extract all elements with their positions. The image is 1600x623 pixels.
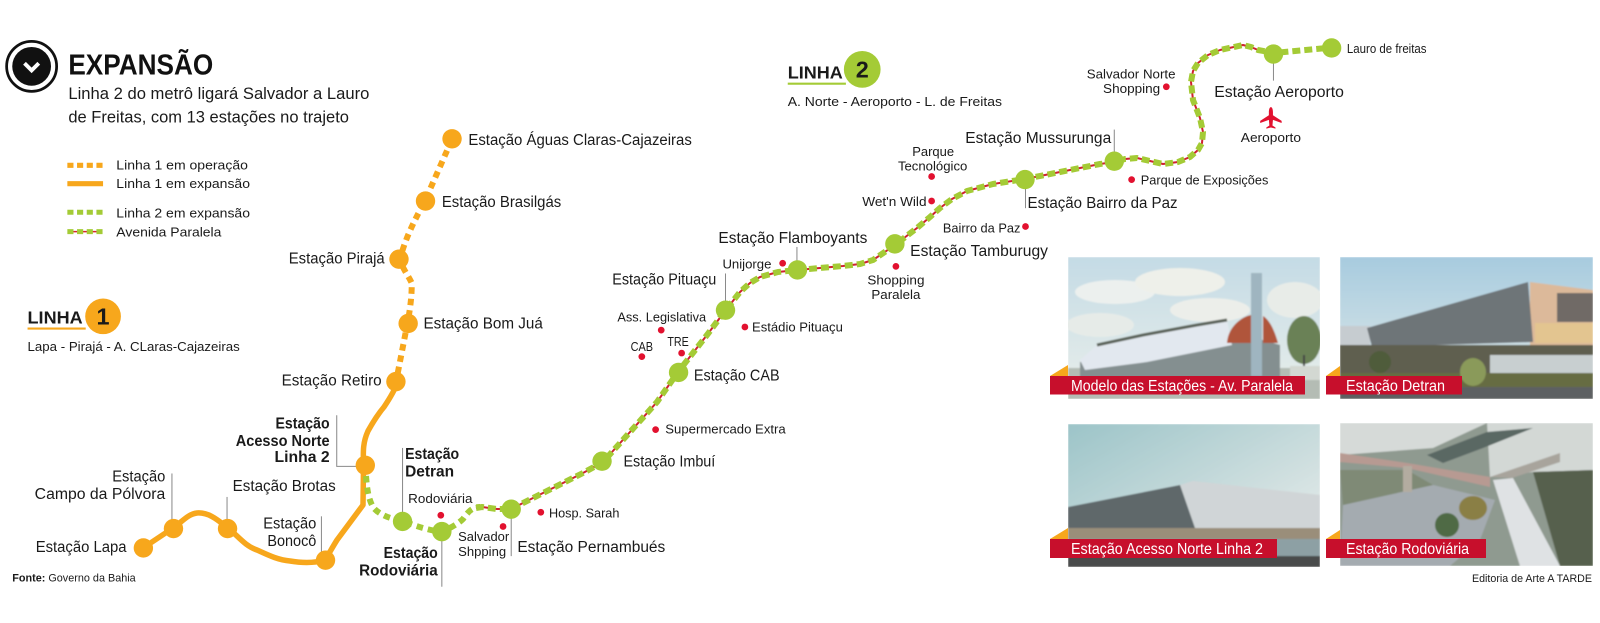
panel: photo estação acesso norte <box>1050 424 1320 567</box>
point of interest labels: Parque <box>912 144 954 159</box>
line 1 in expansion (solid) <box>143 383 397 562</box>
station labels: bold interchange stations: Estação <box>384 545 438 562</box>
heading: linha 2: LINHA <box>788 63 843 83</box>
credit: Editoria de Arte A TARDE <box>1472 573 1592 585</box>
point of interest labels: TRE <box>667 334 689 349</box>
icon: chevron badge <box>7 41 57 91</box>
panel: photo estação rodoviária: Estação Rodoviária <box>1346 541 1469 558</box>
title: EXPANSÃO <box>68 47 213 81</box>
caption tab <box>1050 528 1068 539</box>
station labels: line 1: Estação Lapa <box>36 539 127 556</box>
heading: linha 2: A. Norte - Aeroporto - L. de Freitas <box>788 94 1002 109</box>
station labels: line 2 <box>517 84 1344 556</box>
legend <box>67 157 250 240</box>
station labels: bold interchange stations: Rodoviária <box>359 563 438 580</box>
station labels: bold interchange stations <box>236 416 459 580</box>
point of interest labels: Tecnológico <box>898 158 967 173</box>
station labels: line 2: Estação CAB <box>694 368 780 385</box>
station labels: bold interchange stations: Detran <box>405 464 454 481</box>
station labels: line 2: Estação Aeroporto <box>1214 84 1344 101</box>
station labels: bold interchange stations: Estação <box>276 416 330 433</box>
station labels: bold interchange stations: Estação <box>405 446 459 463</box>
panel: photo estação rodoviária <box>1326 423 1593 566</box>
points of interest dots <box>437 83 1170 530</box>
station labels: bold interchange stations: Acesso Norte <box>236 433 330 450</box>
point of interest labels: Bairro da Paz <box>943 221 1020 236</box>
point of interest labels: Aeroporto <box>1241 130 1301 145</box>
station labels: line 2: Estação Bairro da Paz <box>1028 195 1178 212</box>
heading: linha 1: Lapa - Pirajá - A. CLaras-Cajazeiras <box>28 339 240 354</box>
panel: photo estação acesso norte: Estação Acesso Norte Linha 2 <box>1071 541 1263 558</box>
heading: linha 1: LINHA <box>28 307 83 327</box>
subtitle <box>68 85 369 126</box>
heading: linha 1 <box>28 298 240 354</box>
station labels: line 1: Estação <box>263 516 316 533</box>
caption tab <box>1326 366 1340 376</box>
caption tab <box>1050 365 1068 376</box>
panel: photo modelo das estações: Modelo das Estações - Av. Paralela <box>1071 378 1293 395</box>
panel: photo estação detran: Estação Detran <box>1346 378 1445 395</box>
leader lines <box>172 54 1273 587</box>
legend: Linha 1 em expansão <box>116 176 250 191</box>
caption tab <box>1326 530 1340 539</box>
station labels: line 1: Estação Águas Claras-Cajazeiras <box>468 132 692 149</box>
station labels: line 2: Estação Tamburugy <box>910 243 1048 260</box>
station labels: line 2: Estação Pituaçu <box>612 272 716 289</box>
avenida paralela line <box>476 45 1327 509</box>
station labels: line 2: Estação Imbuí <box>623 453 716 470</box>
point of interest labels: Paralela <box>871 287 921 302</box>
point of interest labels: Ass. Legislativa <box>617 309 707 324</box>
point of interest labels: Parque de Exposições <box>1141 173 1269 188</box>
heading: linha 1: 1 <box>97 303 110 329</box>
line 2 in expansion (dashed) <box>366 476 480 532</box>
station labels: line 1: Estação <box>112 469 165 486</box>
station labels: bold interchange stations: Linha 2 <box>274 449 330 466</box>
subtitle: Linha 2 do metrô ligará Salvador a Lauro <box>68 85 369 103</box>
station labels: line 1: Estação Retiro <box>282 373 382 390</box>
point of interest labels: Shopping <box>867 273 924 288</box>
panel: photo modelo das estações <box>1050 257 1323 399</box>
subtitle: de Freitas, com 13 estações no trajeto <box>68 108 349 126</box>
point of interest labels: Wet'n Wild <box>862 194 927 209</box>
station labels: line 2: Estação Pernambués <box>517 539 666 556</box>
station labels: line 1: Bonocô <box>267 533 316 550</box>
heading: linha 2: 2 <box>856 57 869 83</box>
icon: airplane <box>1260 107 1282 129</box>
point of interest labels: CAB <box>631 339 653 354</box>
panel: photo estação detran <box>1326 257 1593 399</box>
station labels: line 2: Estação Flamboyants <box>718 230 868 247</box>
station labels: line 1: Estação Bom Juá <box>423 316 543 333</box>
map and text layer <box>7 38 1427 587</box>
legend: Avenida Paralela <box>116 225 222 240</box>
station labels: line 2: Estação Mussurunga <box>965 130 1112 147</box>
stations: line 1 <box>134 129 462 570</box>
point of interest labels: Rodoviária <box>408 491 473 506</box>
station labels: line 1: Estação Brotas <box>233 478 336 495</box>
source: Fonte: Governo da Bahia <box>12 573 136 585</box>
point of interest labels: Unijorge <box>722 256 771 271</box>
legend: Linha 1 em operação <box>116 157 248 172</box>
station labels: line 1: Campo da Pólvora <box>35 486 166 503</box>
line 1 in operation (dashed) <box>396 140 452 382</box>
point of interest labels: Hosp. Sarah <box>549 505 619 520</box>
point of interest labels: Shopping <box>1103 81 1160 96</box>
point of interest labels: Salvador <box>458 529 510 544</box>
point of interest labels: Salvador Norte <box>1087 67 1176 82</box>
station labels: line 1 <box>35 132 692 556</box>
point of interest labels: Supermercado Extra <box>665 422 786 437</box>
station labels: line 1: Estação Brasilgás <box>442 194 562 211</box>
station labels: line 1: Estação Pirajá <box>289 250 385 267</box>
point of interest labels: Lauro de freitas <box>1347 41 1427 56</box>
point of interest labels <box>408 41 1427 559</box>
legend: Linha 2 em expansão <box>116 205 250 220</box>
heading: linha 2 <box>788 51 1002 109</box>
point of interest labels: Shpping <box>458 544 506 559</box>
stations: line 2 <box>393 38 1341 541</box>
point of interest labels: Estádio Pituaçu <box>752 320 843 335</box>
